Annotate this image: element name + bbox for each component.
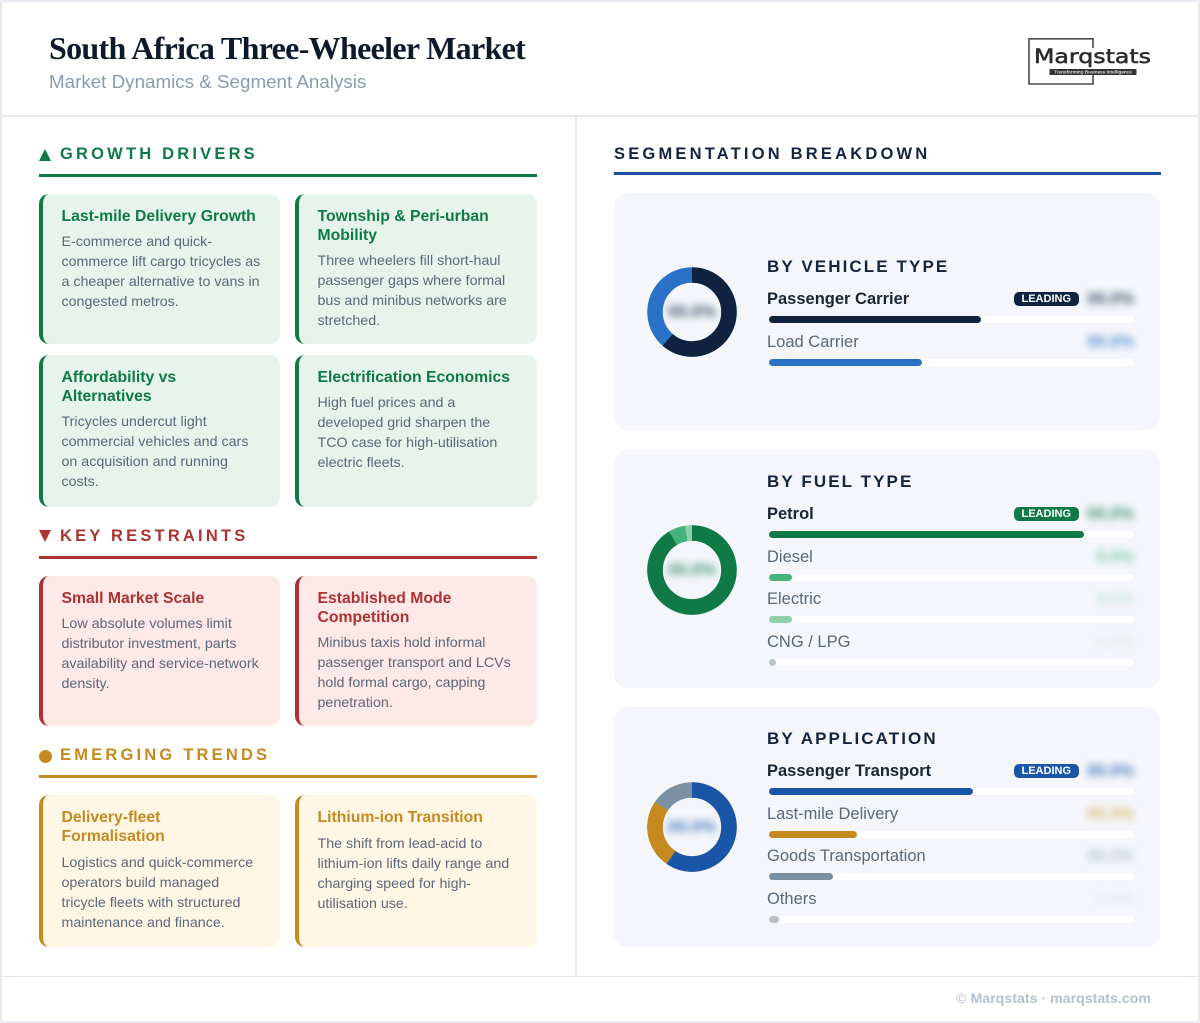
card title: Formalisation bbox=[62, 828, 165, 845]
card: small market scale bbox=[39, 576, 280, 726]
card body: distributor investment, parts bbox=[62, 636, 237, 652]
label: Last-mile Delivery bbox=[767, 805, 898, 823]
bar bbox=[769, 831, 1134, 838]
bar bbox=[769, 359, 1134, 366]
bar bbox=[769, 616, 1134, 622]
badge: leading: LEADING bbox=[1022, 508, 1071, 520]
card body: Minibus taxis hold informal bbox=[318, 635, 485, 651]
card body: on acquisition and running bbox=[62, 454, 228, 470]
bar bbox=[769, 916, 1134, 922]
card title: Established Mode bbox=[318, 590, 451, 607]
badge: leading bbox=[1014, 764, 1078, 778]
card title: Competition bbox=[318, 609, 409, 626]
card body: Three wheelers fill short-haul bbox=[318, 253, 500, 269]
donut: vehicle type bbox=[647, 267, 737, 357]
card: township and peri-urban mobility bbox=[295, 194, 537, 344]
donut: fuel type bbox=[647, 525, 737, 615]
donut value: vehicle type (blurred in source): 00.0% bbox=[668, 302, 716, 321]
card body bbox=[62, 234, 260, 310]
card: lithium-ion transition bbox=[295, 795, 537, 947]
card body: availability and service-network bbox=[62, 656, 259, 672]
value (blurred in source): 00.0% bbox=[1087, 805, 1134, 823]
value (blurred in source): 0.0% bbox=[1096, 890, 1134, 908]
card body bbox=[62, 414, 248, 490]
label: Passenger Transport bbox=[767, 762, 931, 780]
card body: operators build managed bbox=[62, 875, 219, 891]
card body: maintenance and finance. bbox=[62, 915, 225, 931]
card body: The shift from lead-acid to bbox=[318, 836, 482, 852]
card body: Logistics and quick-commerce bbox=[62, 855, 253, 871]
subtitle: Market Dynamics & Segment Analysis bbox=[49, 71, 366, 92]
bar bbox=[769, 873, 1134, 880]
heading rule bbox=[39, 556, 537, 559]
value (blurred in source): 00.0% bbox=[1087, 505, 1134, 523]
label: Passenger Carrier bbox=[767, 290, 909, 308]
card body: passenger transport and LCVs bbox=[318, 655, 511, 671]
label: Petrol bbox=[767, 505, 814, 523]
card body bbox=[62, 855, 253, 931]
row: cng / lpg bbox=[767, 633, 1134, 666]
value (blurred in source): 0.0% bbox=[1096, 590, 1134, 608]
card body: bus and minibus networks are bbox=[318, 293, 507, 309]
badge: leading: LEADING bbox=[1022, 292, 1071, 304]
logo: Marqstats bbox=[1034, 45, 1151, 68]
row: electric bbox=[767, 590, 1135, 623]
heading rule bbox=[614, 172, 1161, 175]
card body: charging speed for high- bbox=[318, 876, 471, 892]
card body bbox=[318, 253, 507, 329]
card body bbox=[62, 616, 259, 692]
card body: Low absolute volumes limit bbox=[62, 616, 232, 632]
card body: developed grid sharpen the bbox=[318, 415, 490, 431]
row: load carrier bbox=[767, 330, 1138, 366]
heading rule bbox=[39, 775, 537, 778]
title: by application: BY APPLICATION bbox=[767, 729, 938, 748]
card body: High fuel prices and a bbox=[318, 395, 455, 411]
footer credit: © Marqstats · marqstats.com bbox=[956, 991, 1151, 1007]
title: by vehicle type: BY VEHICLE TYPE bbox=[767, 257, 949, 276]
card title: Mobility bbox=[318, 227, 377, 244]
column divider bbox=[575, 117, 577, 976]
bar bbox=[769, 574, 1134, 580]
card body: E-commerce and quick- bbox=[62, 234, 212, 250]
card title: Small Market Scale bbox=[62, 590, 204, 607]
row: diesel bbox=[767, 546, 1138, 581]
bar bbox=[769, 531, 1134, 538]
card title: Lithium-ion Transition bbox=[318, 809, 483, 826]
bar bbox=[769, 788, 1134, 794]
heading: growth drivers: GROWTH DRIVERS bbox=[60, 145, 258, 163]
label: Electric bbox=[767, 590, 821, 608]
card body: utilisation use. bbox=[318, 896, 408, 912]
card body bbox=[318, 836, 509, 912]
section: key restraints bbox=[39, 527, 537, 726]
card: electrification economics bbox=[295, 355, 537, 507]
card title bbox=[62, 369, 176, 405]
donut: application bbox=[647, 782, 737, 872]
row: petrol bbox=[767, 502, 1138, 538]
donut value: fuel type (blurred in source): 00.0% bbox=[668, 560, 716, 579]
card title: Township & Peri-urban bbox=[318, 208, 489, 225]
badge: leading bbox=[1014, 292, 1078, 306]
heading rule bbox=[39, 174, 537, 177]
card body: penetration. bbox=[318, 695, 393, 711]
label: CNG / LPG bbox=[767, 633, 850, 651]
footer bbox=[0, 976, 1200, 1023]
card body: a cheaper alternative to vans in bbox=[62, 274, 260, 290]
label: Diesel bbox=[767, 548, 813, 566]
header bbox=[0, 0, 1200, 117]
card body: TCO case for high-utilisation bbox=[318, 435, 497, 451]
card title bbox=[318, 590, 451, 626]
badge: leading: LEADING bbox=[1022, 764, 1071, 776]
row: passenger carrier bbox=[767, 288, 1138, 323]
panel: by fuel type bbox=[614, 450, 1160, 688]
card body: commerce lift cargo tricycles as bbox=[62, 254, 260, 270]
section: growth drivers bbox=[39, 145, 537, 507]
label: Load Carrier bbox=[767, 333, 859, 351]
card body: tricycle fleets with structured bbox=[62, 895, 240, 911]
card body bbox=[318, 635, 511, 711]
icon: circle bbox=[39, 750, 52, 763]
label: Others bbox=[767, 890, 817, 908]
card body bbox=[318, 395, 497, 471]
row: last-mile delivery bbox=[767, 803, 1138, 838]
card title: Alternatives bbox=[62, 388, 152, 405]
value (blurred in source): 00.0% bbox=[1087, 847, 1134, 865]
value (blurred in source): 00.0% bbox=[1087, 762, 1134, 780]
card body: lithium-ion lifts daily range and bbox=[318, 856, 509, 872]
card title: Delivery-fleet bbox=[62, 809, 160, 826]
card body: passenger gaps where formal bbox=[318, 273, 505, 289]
label: Goods Transportation bbox=[767, 847, 926, 865]
value (blurred in source): 00.0% bbox=[1087, 290, 1134, 308]
card: affordability vs alternatives bbox=[39, 355, 280, 507]
panel: by vehicle type bbox=[614, 193, 1160, 430]
card title: Electrification Economics bbox=[318, 369, 510, 386]
card title bbox=[62, 809, 165, 845]
value (blurred in source): 0.0% bbox=[1096, 548, 1134, 566]
bar bbox=[769, 316, 1134, 322]
heading: key restraints: KEY RESTRAINTS bbox=[60, 527, 248, 545]
card body: congested metros. bbox=[62, 294, 179, 310]
logo bbox=[1028, 38, 1151, 85]
card body: Tricycles undercut light bbox=[62, 414, 207, 430]
section: emerging trends bbox=[39, 746, 537, 947]
card body: costs. bbox=[62, 474, 99, 490]
heading: emerging trends: EMERGING TRENDS bbox=[60, 746, 270, 764]
card body: stretched. bbox=[318, 313, 380, 329]
card body: commercial vehicles and cars bbox=[62, 434, 248, 450]
card body: electric fleets. bbox=[318, 455, 405, 471]
value (blurred in source): 00.0% bbox=[1087, 333, 1134, 351]
card: established mode competition bbox=[295, 576, 537, 726]
card body: density. bbox=[62, 676, 110, 692]
card title bbox=[318, 208, 489, 244]
card title: Last-mile Delivery Growth bbox=[62, 208, 256, 225]
row: goods transportation bbox=[767, 847, 1136, 880]
bar bbox=[769, 659, 1134, 666]
logo: Transforming Business Intelligence bbox=[1054, 70, 1132, 75]
badge: leading bbox=[1014, 506, 1078, 521]
panel: by application bbox=[614, 707, 1160, 947]
title: by fuel type: BY FUEL TYPE bbox=[767, 472, 913, 490]
donut value: application (blurred in source): 00.0% bbox=[668, 817, 716, 836]
row: passenger transport bbox=[767, 760, 1138, 795]
value (blurred in source): 0.0% bbox=[1096, 633, 1134, 651]
card: delivery-fleet formalisation bbox=[39, 795, 280, 947]
card: last-mile delivery growth bbox=[39, 194, 280, 344]
card title: Affordability vs bbox=[62, 369, 176, 386]
icon: up triangle bbox=[39, 149, 51, 161]
row: others bbox=[767, 890, 1134, 923]
heading: segmentation breakdown: SEGMENTATION BREAKDOWN bbox=[614, 145, 930, 163]
card body: hold formal cargo, capping bbox=[318, 675, 485, 691]
icon: down triangle bbox=[39, 530, 51, 542]
title: South Africa Three-Wheeler Market bbox=[49, 30, 525, 66]
